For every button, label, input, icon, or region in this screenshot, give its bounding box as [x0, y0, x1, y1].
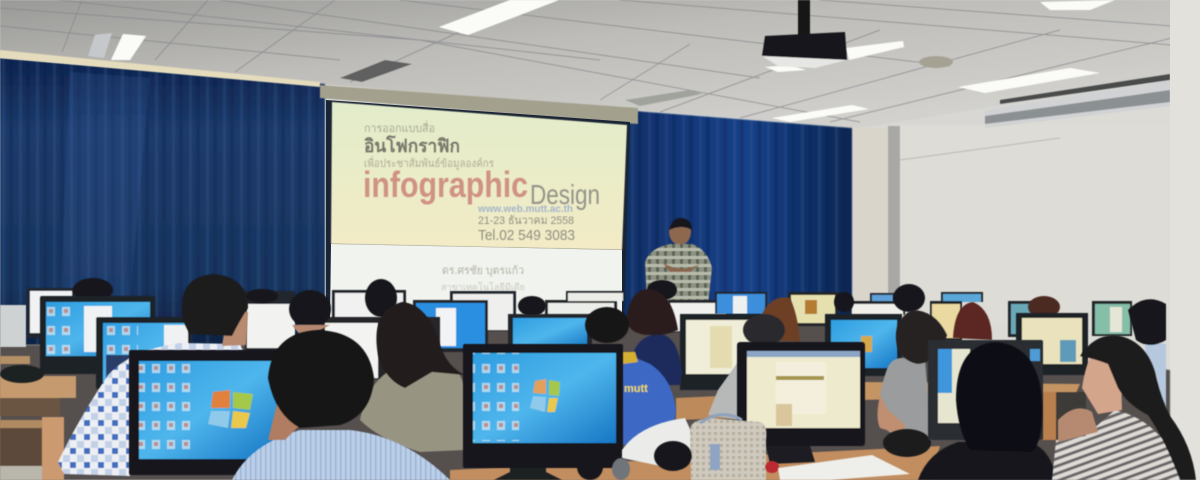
- student: blue jacket: [585, 307, 676, 445]
- slide text: เพื่อประชาสัมพันธ์ข้อมูลองค์กร: [364, 155, 494, 170]
- projector: [762, 0, 847, 68]
- white jacket on chair: [622, 418, 695, 470]
- monitor: cream right: [1016, 313, 1088, 375]
- handbag and headphones: [577, 415, 779, 480]
- slide text: สาขาเทคโนโลยีมีเดีย: [441, 282, 525, 292]
- man in checked shirt: [58, 274, 248, 476]
- slide text: ดร.ศรชัย บุตรแก้ว: [442, 265, 524, 277]
- slide text: อินโฟกราฟิก: [364, 135, 460, 156]
- slide text: infographic: [363, 164, 528, 205]
- student: back right, grey blouse: [878, 310, 947, 440]
- curtain rail: [0, 50, 320, 87]
- student: small dark head: [708, 314, 785, 420]
- desks, left: [0, 305, 76, 480]
- back wall: [852, 104, 1172, 420]
- slide text: Tel.02 549 3083: [478, 227, 575, 244]
- mid-row monitors: [40, 296, 1088, 390]
- right column: [1170, 0, 1200, 480]
- student: man right edge: [1128, 299, 1166, 412]
- woman in black: [918, 342, 1056, 480]
- projection screen: [326, 100, 630, 320]
- student: head top-left of row: [289, 290, 331, 335]
- student: red hair: [953, 302, 992, 340]
- monitor: mid left desktop: [40, 296, 155, 374]
- windows logo: [208, 390, 253, 428]
- student: navy top: [626, 289, 682, 385]
- slide text: Design: [530, 179, 600, 210]
- presenter: [645, 218, 712, 305]
- student: blue jacket: mutt: [624, 383, 648, 395]
- slide text: www.web.mutt.ac.th: [477, 203, 573, 215]
- monitor: cream centre: [680, 314, 760, 390]
- front-centre monitor: [463, 344, 623, 480]
- projector screen housing: [320, 85, 638, 124]
- ceiling lights: [111, 0, 1115, 122]
- rear students: [73, 278, 1060, 318]
- windows logo: [530, 379, 560, 412]
- desks, right: [450, 382, 1086, 480]
- front-left monitor: [129, 350, 279, 475]
- woman in tan cardigan: [360, 302, 465, 452]
- monitor: blue centre: [508, 314, 592, 350]
- man in front with blue shirt: [232, 330, 450, 480]
- monitor: second row left: [96, 317, 191, 389]
- slide text: การออกแบบสื่อ: [364, 120, 435, 135]
- ceiling: [0, 0, 1172, 128]
- mid students: [289, 289, 1166, 445]
- front-right dark monitor: [928, 340, 1043, 440]
- papers on desk: [778, 455, 910, 480]
- monitor: white browser: [320, 317, 440, 379]
- rear monitors: [27, 288, 1132, 352]
- slide text: [363, 120, 600, 292]
- room floor shadow behind desks: [0, 320, 1170, 480]
- right curtain: [622, 110, 852, 320]
- monitor: blue right: [825, 314, 902, 376]
- student: brown hair: [762, 297, 800, 342]
- front-right monitor with browser: [737, 342, 865, 464]
- woman in striped top: [1052, 335, 1196, 480]
- desk headphones: [0, 365, 931, 457]
- left curtain: [0, 58, 325, 345]
- air conditioner: [985, 74, 1170, 128]
- slide text: 21-23 ธันวาคม 2558: [478, 215, 574, 227]
